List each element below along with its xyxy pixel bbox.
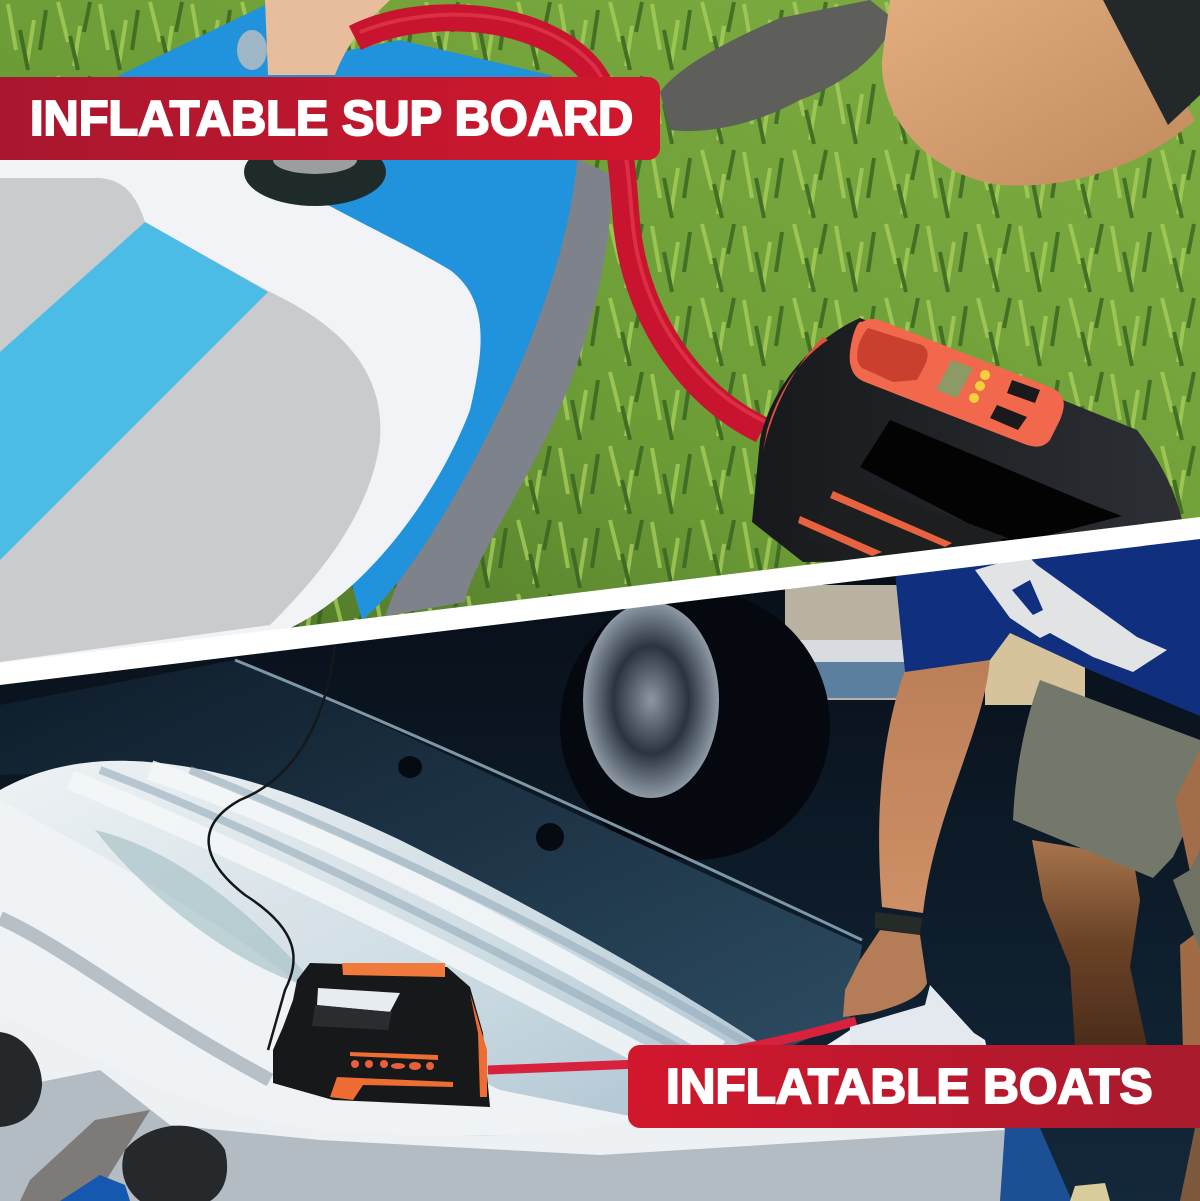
heading: inflatable boats: INFLATABLE BOATS [666, 1059, 1153, 1114]
boat valves [0, 1032, 42, 1127]
boat edge by hand [850, 985, 985, 1045]
board gray side wall [385, 150, 612, 616]
shorts [1103, 0, 1200, 125]
far shorts leg [1173, 850, 1200, 950]
other hand [1175, 750, 1200, 872]
floor shadow streak [0, 918, 270, 1080]
pump handle gap [317, 988, 400, 1012]
panel: SUP board photo [0, 0, 1200, 680]
lower right ground [1070, 1183, 1110, 1201]
heading: inflatable boats [628, 1045, 1200, 1128]
board gray pad [0, 178, 380, 662]
shoe [660, 0, 895, 131]
background car and sand [785, 585, 1085, 705]
person far leg [1180, 930, 1200, 1050]
pump front strip [350, 1052, 438, 1060]
pump vent [857, 328, 928, 382]
front clear tube [40, 1030, 1005, 1155]
shorts [1013, 680, 1200, 878]
board white deck [0, 160, 481, 665]
tire [560, 590, 830, 860]
pump control panel [969, 524, 1008, 544]
diagonal white divider [0, 517, 1200, 685]
red inflation hose [488, 1021, 856, 1070]
pump icons [351, 1060, 434, 1070]
person arm [879, 658, 990, 913]
blue shirt [895, 530, 1200, 716]
boat floor [0, 761, 770, 1140]
boat pump [273, 963, 490, 1107]
panel: inflatable boat photo [0, 520, 1200, 1201]
floor white foreground [0, 823, 629, 1136]
heading: inflatable SUP board [0, 77, 660, 160]
pump red side strip [761, 337, 828, 462]
person near leg [1032, 840, 1147, 1046]
pump body [752, 318, 1182, 562]
leg [882, 0, 1195, 186]
hand [265, 0, 390, 75]
clear tube dark patch [20, 1110, 150, 1201]
pump top panel [342, 963, 445, 977]
grass texture [0, 0, 1200, 680]
pump orange panel [850, 319, 1064, 447]
pump orange strips [830, 491, 952, 547]
hand [843, 930, 927, 1017]
board blue stripe [0, 222, 268, 560]
board blue deck edge [118, 5, 578, 620]
watch [875, 912, 922, 935]
blue water [1000, 1128, 1072, 1201]
shirt lettering [975, 555, 1167, 672]
pump yellow LEDs [969, 370, 990, 403]
board valve [244, 160, 386, 206]
chrome hub [583, 602, 719, 798]
power cord [209, 645, 335, 1050]
top-left valve [237, 30, 267, 70]
pump side strip [470, 993, 487, 1097]
heading: inflatable SUP board: INFLATABLE SUP BOARD [30, 92, 633, 146]
floor ridges [70, 770, 720, 1070]
pump handle opening [860, 420, 1122, 545]
pump inner dark [312, 1005, 392, 1030]
boat tube [0, 660, 862, 1060]
pump display [936, 360, 973, 398]
shadow on floor [95, 830, 304, 983]
pump body [273, 963, 490, 1107]
pump lower orange logo [330, 1077, 453, 1100]
tube holes [398, 756, 564, 851]
lower right leg [1180, 1128, 1200, 1201]
red hose [355, 18, 762, 430]
pump switches [990, 380, 1040, 430]
